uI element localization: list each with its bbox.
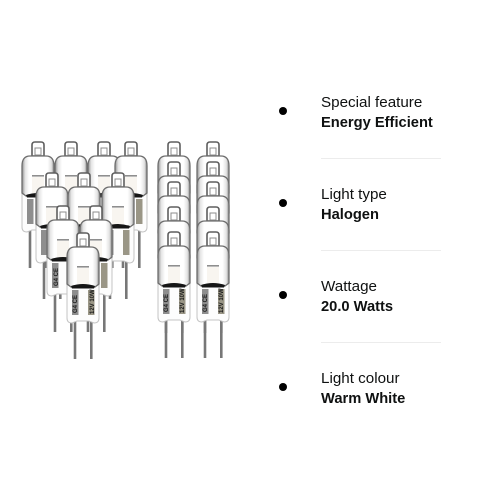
- feature: special feature: Energy Efficient: [321, 115, 433, 131]
- feature: light colour: Warm White: [321, 391, 405, 407]
- feature: wattage: 20.0 Watts: [321, 299, 393, 315]
- bulb: front of left cluster: G4 CE: [73, 295, 79, 313]
- feature: light type: Halogen: [321, 207, 379, 223]
- bulbs: right cluster right column: [197, 142, 229, 358]
- bulbs: right cluster right column: 12V 10W: [219, 288, 225, 313]
- feature: light type: [279, 186, 387, 223]
- bulbs: right cluster left column: [158, 142, 190, 358]
- bulbs: right cluster right column: G4 CE: [203, 294, 209, 312]
- feature: light colour: Light colour: [321, 370, 400, 387]
- feature: special feature: [279, 94, 433, 131]
- bulbs: second row of left cluster: [36, 173, 134, 299]
- bulb: front of left cluster: 12V 10W: [90, 289, 96, 314]
- feature: light colour: [279, 370, 405, 407]
- feature: wattage: [279, 278, 393, 315]
- bulbs: back row of left cluster: [22, 142, 147, 268]
- feature: light type: Light type: [321, 186, 387, 203]
- bulbs: right cluster left column: 12V 10W: [180, 288, 186, 313]
- bulbs: third row of left cluster: G4 CE: [54, 268, 60, 286]
- product image: halogen bulbs: [21, 141, 230, 359]
- feature: special feature: Special feature: [321, 94, 422, 111]
- bulb: front of left cluster: [67, 233, 99, 359]
- bulbs: third row of left cluster: [47, 206, 112, 332]
- feature: wattage: Wattage: [321, 278, 377, 295]
- bulbs: right cluster left column: G4 CE: [164, 294, 170, 312]
